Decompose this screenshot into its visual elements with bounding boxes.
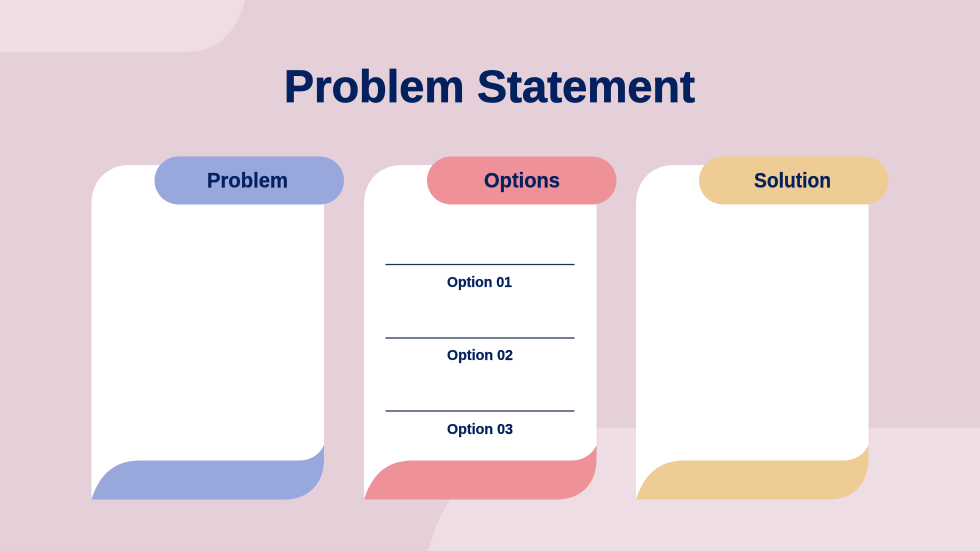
card body [364, 165, 596, 499]
card body [636, 165, 868, 499]
heading: Solution [754, 170, 831, 192]
option 02: Option 02 [447, 348, 513, 364]
panel: solution [636, 156, 888, 500]
heading pill [154, 156, 344, 204]
heading: Problem [207, 170, 288, 192]
heading: Options [484, 170, 560, 192]
card footer [364, 445, 596, 500]
card footer [636, 445, 868, 500]
heading pill [427, 156, 616, 204]
card footer [92, 445, 324, 500]
option 01: Option 01 [447, 275, 512, 291]
title: Problem Statement [284, 61, 695, 112]
card body [92, 165, 324, 499]
panel: problem [92, 156, 344, 500]
panel: options [364, 156, 616, 500]
heading pill [699, 156, 888, 204]
option 03: Option 03 [447, 422, 513, 438]
